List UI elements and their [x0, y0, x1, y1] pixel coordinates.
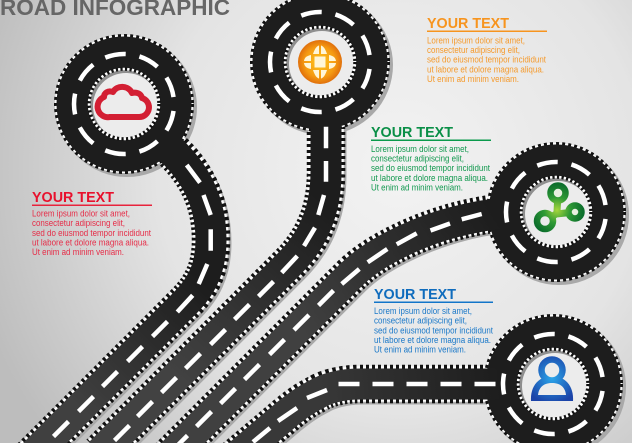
text block: green: YOUR TEXT	[371, 125, 453, 141]
text block: red: ut labore et dolore magna aliqua.	[32, 237, 149, 247]
text block: green	[371, 125, 491, 192]
text block: red: YOUR TEXT	[32, 190, 114, 206]
text block: green: Ut enim ad minim veniam.	[371, 182, 463, 192]
text block: orange: Lorem ipsum dolor sit amet,	[427, 36, 525, 46]
text block: orange: Ut enim ad minim veniam.	[427, 74, 519, 84]
text block: blue: YOUR TEXT	[374, 287, 456, 303]
text block: green: ut labore et dolore magna aliqua.	[371, 173, 488, 183]
text block: orange: ut labore et dolore magna aliqua.	[427, 64, 544, 74]
icon: globe	[298, 40, 342, 84]
text block: red: consectetur adipiscing elit,	[32, 218, 125, 228]
road and roundabout: green nodes branch	[165, 144, 624, 443]
text block: orange: consectetur adipiscing elit,	[427, 45, 520, 55]
road and roundabout: blue person branch	[235, 316, 620, 443]
text block: blue: ut labore et dolore magna aliqua.	[374, 335, 491, 345]
icon: person	[531, 360, 573, 401]
text block: green: Lorem ipsum dolor sit amet,	[371, 144, 469, 154]
icon: cloud	[98, 87, 149, 117]
text block: orange: YOUR TEXT	[427, 16, 509, 32]
text block: red: Ut enim ad minim veniam.	[32, 247, 124, 257]
text block: blue: consectetur adipiscing elit,	[374, 316, 467, 326]
road and roundabout: red cloud branch	[30, 36, 214, 443]
text block: blue	[374, 287, 493, 355]
icon: connected nodes	[537, 186, 582, 229]
text block: orange: sed do eiusmod tempor incididunt	[427, 55, 546, 65]
text block: blue: Lorem ipsum dolor sit amet,	[374, 306, 472, 316]
text block: blue: sed do eiusmod tempor incididunt	[374, 325, 493, 335]
text block: green: sed do eiusmod tempor incididunt	[371, 163, 490, 173]
road and roundabout: orange globe branch	[90, 0, 388, 443]
text block: orange	[427, 16, 547, 84]
text block: red: sed do eiusmod tempor incididunt	[32, 228, 151, 238]
text block: blue: Ut enim ad minim veniam.	[374, 345, 466, 355]
text block: red: Lorem ipsum dolor sit amet,	[32, 208, 130, 218]
text block: green: consectetur adipiscing elit,	[371, 154, 464, 164]
text block: red	[32, 190, 152, 257]
